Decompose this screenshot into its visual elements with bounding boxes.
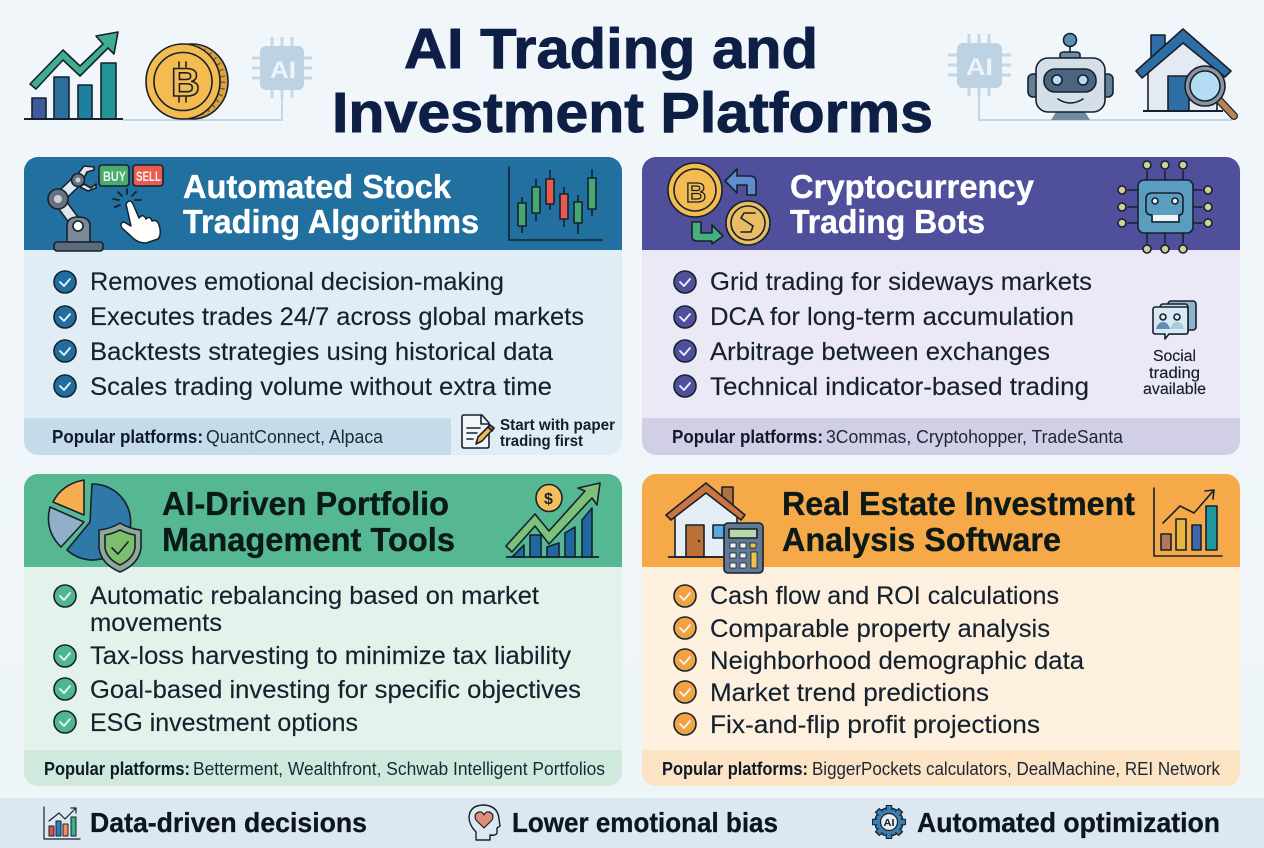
footer: popular platforms [642,418,1240,455]
icon: house with calculator [666,483,763,573]
footer: popular platforms: Betterment, Wealthfront, Schwab Intelligent Portfolios [193,759,605,779]
footer: popular platforms [24,750,622,786]
panel: automated stock trading algorithms [24,157,622,455]
bullet list: Comparable property analysis [710,615,1050,643]
callout: social trading: available [1143,381,1206,398]
heading: Analysis Software [782,521,1061,558]
heading: Trading Bots [790,203,985,240]
panel: real estate investment analysis software [642,474,1240,786]
bullet list: Removes emotional decision-making [90,268,504,296]
icon: data chart [44,807,80,839]
bullet list: Neighborhood demographic data [710,647,1084,675]
icon: buy button [99,165,129,186]
bullet list: Fix-and-flip profit projections [710,711,1040,739]
callout: paper trading: trading first [500,433,584,450]
heading [162,485,455,558]
callout: paper trading [462,415,615,450]
icon: house with magnifier [1136,29,1234,116]
footer: popular platforms: Popular platforms: [672,427,823,447]
icon: pie chart with shield [48,480,141,572]
bullet list: ESG investment options [90,709,358,737]
panel header [24,474,622,567]
heading: Cryptocurrency [790,168,1035,205]
callout: paper trading: Start with paper [500,417,615,434]
heading [183,168,479,240]
heading [790,168,1035,240]
icon: circuit robot chip [1118,161,1212,253]
icon: growth with dollar coin: $ [544,491,553,508]
footer: popular platforms [642,750,1240,786]
icon: AI chip right [948,34,1011,96]
heading [782,485,1135,558]
footer: popular platforms: Popular platforms: [44,759,190,779]
bullet list: Executes trades 24/7 across global markets [90,303,584,331]
icon: coin exchange: B [686,177,706,208]
icon: robot arm [48,166,103,251]
bullet list [54,582,581,737]
bullet list: Cash flow and ROI calculations [710,582,1059,610]
heading: Management Tools [162,521,455,558]
footer: popular platforms: QuantConnect, Alpaca [206,427,384,447]
bullet list: Goal-based investing for specific objectives [90,676,581,704]
callout: social trading: Social [1153,348,1196,365]
icon: growth bar chart with arrow [24,32,123,119]
panel body [24,567,622,750]
bullet list: movements [90,609,222,637]
title: AI Trading and [404,17,818,81]
icon: bar chart with trend [1154,488,1222,556]
icon: growth with dollar coin [506,483,600,557]
panel body [24,250,622,455]
bullet list: Backtests strategies using historical data [90,338,553,366]
panel: AI-driven portfolio management tools [24,474,622,786]
icon: AI chip left: AI [270,57,296,84]
icon: right circuit connector [979,88,1232,120]
icon: bitcoin coin: B [171,61,200,105]
footer: popular platforms: Popular platforms: [662,759,808,779]
callout: social trading: trading [1149,365,1200,382]
bullet list [54,268,584,401]
icon: candlestick chart [509,167,602,240]
panel: cryptocurrency trading bots [642,157,1240,455]
heading: Real Estate Investment [782,485,1135,522]
bullet list [674,582,1084,739]
bottom benefits bar [0,798,1264,848]
icon: coin exchange [668,163,770,245]
icon: AI gear: AI [884,818,895,829]
bullet list: DCA for long-term accumulation [710,303,1074,331]
icon: head with heart [469,805,500,840]
callout: social trading [1143,301,1206,398]
panel header [642,474,1240,567]
footer: popular platforms: Popular platforms: [52,427,203,447]
bullet list: Grid trading for sideways markets [710,268,1092,296]
icon: sell button: SELL [136,168,161,184]
footer: popular platforms: 3Commas, Cryptohopper, TradeSanta [826,427,1124,447]
heading: Automated Stock [183,168,452,205]
title [332,17,933,145]
panel header [24,157,622,250]
icon: buy button: BUY [103,168,127,184]
heading: Trading Algorithms [183,203,479,240]
icon: AI chip left [252,37,312,98]
text: automated optimization: Automated optimization [917,807,1220,838]
bullet list: Automatic rebalancing based on market [90,582,539,610]
icon: sell button [133,165,163,186]
panel header [642,157,1240,250]
panel body [642,250,1240,418]
footer: popular platforms: BiggerPockets calculators, DealMachine, REI Network [812,759,1221,779]
title: Investment Platforms [332,81,933,145]
icon: AI gear [872,805,906,839]
text: data-driven decisions: Data-driven decisions [90,807,367,838]
icon: bitcoin coin [146,44,228,119]
bullet list: Arbitrage between exchanges [710,338,1050,366]
text: lower emotional bias: Lower emotional bias [512,807,778,838]
bullet list: Market trend predictions [710,679,989,707]
icon: left circuit connector [123,90,282,120]
footer: popular platforms [24,418,451,455]
icon: AI chip right: AI [966,54,993,81]
panel body [642,567,1240,750]
icon: pointing hand [113,189,160,243]
bullet list: Tax-loss harvesting to minimize tax liability [90,642,572,670]
bullet list: Scales trading volume without extra time [90,373,552,401]
icon: robot head [1028,34,1113,120]
bullet list [674,268,1092,401]
bullet list: Technical indicator-based trading [710,373,1089,401]
heading: AI-Driven Portfolio [162,485,449,522]
